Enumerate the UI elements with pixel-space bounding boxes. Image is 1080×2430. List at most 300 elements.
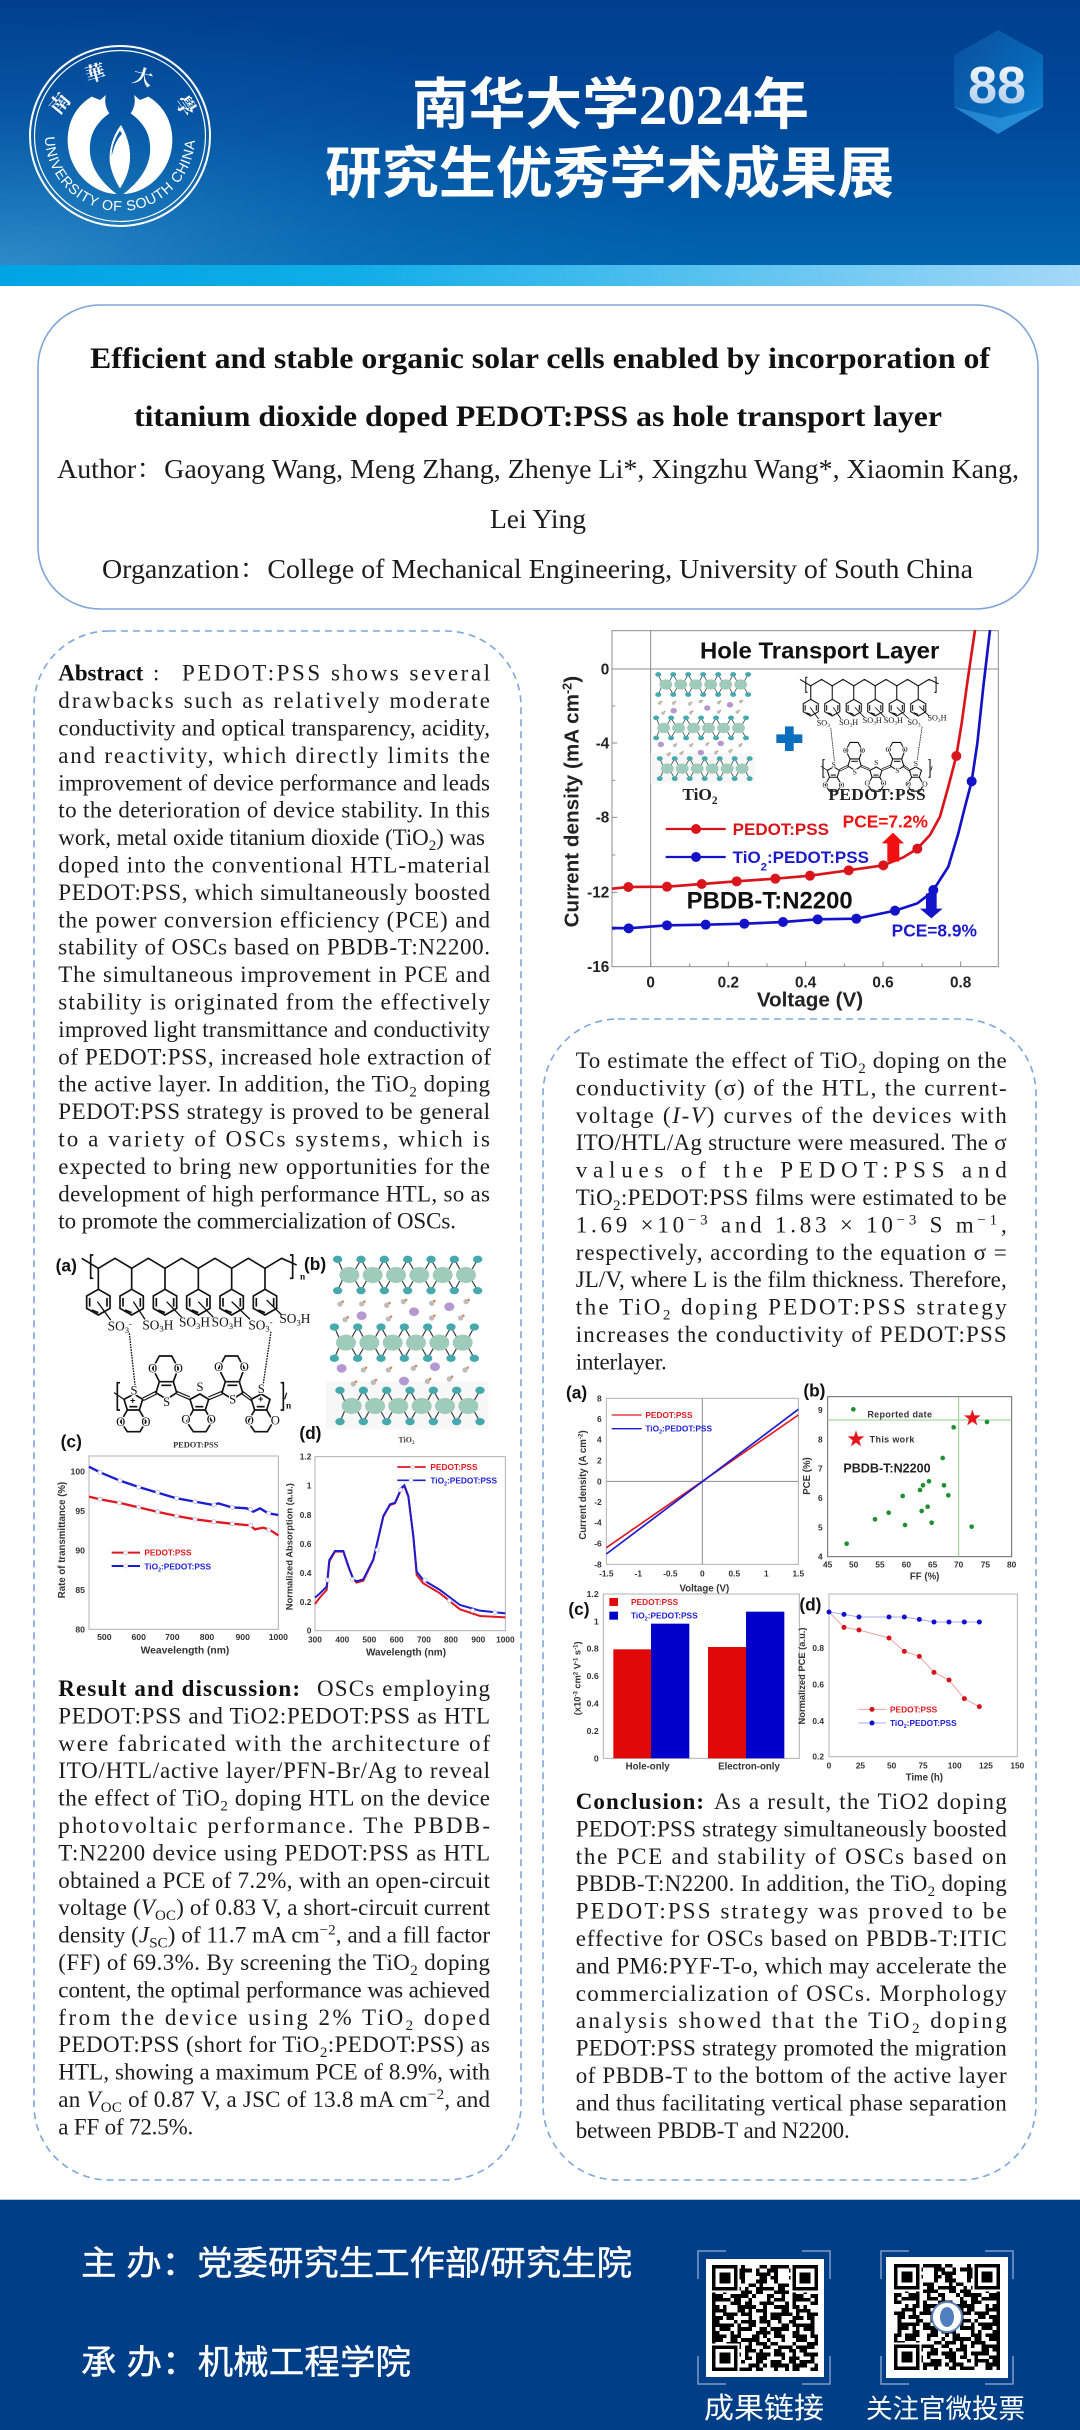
text: abstract: stability of OSCs based on PBDB-T:N2200. bbox=[58, 935, 490, 960]
chart: I-V curves: 6 bbox=[597, 1414, 602, 1424]
text: result and discussion: −2 bbox=[320, 1923, 336, 1939]
chart: normalized absorption: 500 bbox=[362, 1635, 377, 1645]
chemical structure: PEDOT:PSS: O bbox=[148, 1362, 157, 1376]
chart: normalized absorption: 1 bbox=[307, 1481, 312, 1491]
chart: mobility bars: -1 bbox=[573, 1657, 579, 1663]
chart: normalized absorption: 700 bbox=[417, 1635, 431, 1645]
chemical structure: PEDOT:PSS: 3 bbox=[159, 1324, 164, 1334]
text: result and discussion: OC bbox=[155, 1908, 176, 1924]
chart: stability over time: 25 bbox=[856, 1760, 865, 1770]
text: conductivity estimate: 2 bbox=[613, 1198, 621, 1214]
label: PCE 7.2% with arrow bbox=[843, 811, 928, 862]
figure: structures and optical spectra bbox=[56, 1254, 515, 1659]
axis title: current density: -2 bbox=[560, 683, 574, 694]
chart: stability over time: 0.2 bbox=[812, 1752, 824, 1762]
chart: mobility bars: Electron-only bbox=[718, 1762, 780, 1773]
text: result and discussion: 2 bbox=[406, 2018, 413, 2034]
chart: mobility bars: 0.6 bbox=[587, 1671, 599, 1681]
title: 南华大学2024年 bbox=[412, 75, 809, 137]
chart: stability over time: (d) bbox=[799, 1595, 821, 1615]
chemical structure: PEDOT:PSS: 3 bbox=[296, 1317, 301, 1327]
text: abstract: improved light transmittance and conductivity bbox=[58, 1017, 491, 1042]
chart: transmittance: 700 bbox=[165, 1632, 180, 1642]
text: conductivity estimate: the TiO bbox=[576, 1295, 660, 1320]
text: conductivity estimate: doping PEDOT:PSS strategy bbox=[673, 1295, 1007, 1320]
chart: PCE vs FF scatter: 5 bbox=[818, 1522, 823, 1532]
text: conductivity estimate: −1 bbox=[977, 1212, 997, 1228]
chart: I-V curves: 0 bbox=[700, 1568, 705, 1578]
chemical structure: PEDOT:PSS: O bbox=[865, 779, 871, 788]
axis title: current density: Current density (mA cm bbox=[561, 694, 584, 927]
text: conductivity estimate: JL/V, where L is the film thickness. Therefore, bbox=[576, 1267, 1007, 1292]
chemical structure: PEDOT:PSS: O bbox=[116, 1415, 125, 1429]
chart: I-V curves: PEDOT:PSS bbox=[645, 1410, 693, 1420]
text: abstract: development of high performance HTL, so as bbox=[58, 1181, 490, 1206]
chart: normalized absorption: 1.2 bbox=[300, 1452, 312, 1462]
x axis labels: 0.4 bbox=[795, 974, 817, 991]
chart: I-V curves: 0.5 bbox=[729, 1568, 740, 1578]
label: (b): (b) bbox=[304, 1254, 326, 1274]
chemical structure: PEDOT:PSS: O bbox=[886, 745, 892, 754]
text: conductivity estimate: 1.69 ×10 bbox=[576, 1212, 684, 1237]
chemical structure: PEDOT:PSS: O bbox=[214, 1360, 223, 1374]
text: conductivity estimate: 2 bbox=[858, 1061, 866, 1077]
chart: stability over time: :PEDOT:PSS bbox=[907, 1718, 957, 1728]
chemical structure: PEDOT:PSS: O bbox=[881, 779, 887, 788]
illustration: TiO2 layers: 2 bbox=[712, 795, 718, 807]
chart: PCE vs FF scatter: 8 bbox=[818, 1434, 823, 1444]
text: conclusion: doping bbox=[935, 1871, 1007, 1896]
chemical structure: PEDOT:PSS: S bbox=[258, 1382, 265, 1396]
chart: I-V curves: Current density (A cm bbox=[578, 1439, 589, 1540]
text: conductivity estimate: conductivity (σ) of the HTL, the current- bbox=[576, 1075, 1007, 1100]
chart: I-V curves: -0.5 bbox=[663, 1568, 678, 1578]
title: 研究生优秀学术成果展 bbox=[325, 142, 894, 205]
chart: mobility bars: 0.2 bbox=[587, 1726, 599, 1736]
chemical structure: PEDOT:PSS: S bbox=[163, 1395, 170, 1409]
chemical structure: PEDOT:PSS: 3 bbox=[894, 721, 897, 727]
chart: PCE vs FF scatter: 70 bbox=[954, 1560, 964, 1570]
chart: mobility bars: 0.4 bbox=[587, 1699, 599, 1709]
text: result and discussion: the effect of TiO bbox=[58, 1786, 220, 1811]
text: conclusion: and PM6:PYF-T-o, which may accelerate the bbox=[576, 1953, 1007, 1978]
chart: normalized absorption: 0.2 bbox=[300, 1597, 312, 1607]
chart: mobility bars: TiO bbox=[631, 1611, 645, 1621]
text: result and discussion: doped bbox=[416, 2005, 490, 2030]
chemical structure: PEDOT:PSS: SO bbox=[179, 1315, 196, 1330]
chart: normalized absorption: 0.4 bbox=[300, 1568, 312, 1578]
x axis labels: 0.2 bbox=[718, 974, 739, 991]
illustration: TiO2 layers: TiO bbox=[398, 1435, 412, 1444]
chemical structure: PEDOT:PSS: + bbox=[258, 1394, 264, 1404]
chemical structure: PEDOT:PSS: O bbox=[141, 1415, 151, 1429]
chart: mobility bars: 0 bbox=[594, 1753, 599, 1763]
text: result and discussion: OSCs employing bbox=[317, 1676, 490, 1701]
text: conductivity estimate: respectively, according to the equation σ = bbox=[576, 1240, 1007, 1265]
text: conductivity estimate: voltage (I-V) curves of the devices with bbox=[576, 1103, 1007, 1128]
chemical structure: PEDOT:PSS: H bbox=[941, 714, 947, 723]
text: conductivity estimate: :PEDOT:PSS films were estimated to be bbox=[621, 1185, 1007, 1210]
illustration: TiO2 layers: TiO bbox=[682, 785, 712, 804]
chemical structure: PEDOT:PSS: 3 bbox=[125, 1325, 129, 1335]
chart: I-V curves: 2 bbox=[597, 1455, 602, 1465]
text: conclusion: Conclusion: bbox=[576, 1789, 704, 1814]
text: abstract: conductivity and optical transparency, acidity, bbox=[58, 716, 490, 740]
chart: PCE vs FF scatter: 45 bbox=[823, 1560, 833, 1570]
text: result and discussion: HTL, showing a maximum PCE of 8.9%, with bbox=[58, 2060, 491, 2085]
text: authors: Lei Ying bbox=[490, 504, 586, 534]
chart: I-V curves bbox=[566, 1382, 804, 1595]
text: abstract: and reactivity, which directly limits the bbox=[58, 743, 490, 768]
chart: transmittance: 80 bbox=[75, 1624, 85, 1634]
legend: TiO bbox=[733, 848, 761, 867]
chart: transmittance: 90 bbox=[75, 1546, 85, 1556]
text: result and discussion: density (J bbox=[58, 1923, 149, 1948]
chemical structure: PEDOT:PSS: 3 bbox=[265, 1324, 270, 1334]
chart: mobility bars: (x10 bbox=[573, 1697, 583, 1715]
chemical structure: PEDOT:PSS: S bbox=[874, 758, 878, 767]
chart: I-V curves: TiO bbox=[645, 1424, 659, 1434]
chart: transmittance: Weavelength (nm) bbox=[141, 1645, 229, 1656]
chart: mobility bars: :PEDOT:PSS bbox=[648, 1611, 698, 1621]
text: abstract: of PEDOT:PSS, increased hole extraction of bbox=[58, 1044, 491, 1069]
chart: normalized absorption: Wavelength (nm) bbox=[366, 1648, 446, 1659]
chart: mobility bars: 2 bbox=[573, 1671, 579, 1675]
chemical structure: PEDOT:PSS: O bbox=[860, 746, 866, 755]
text: conclusion: PEDOT:PSS strategy promoted the migration bbox=[576, 2036, 1007, 2061]
chemical structure: PEDOT:PSS: SO bbox=[248, 1317, 265, 1332]
text: result and discussion: , and a fill factor bbox=[336, 1923, 490, 1948]
text: result and discussion: T:N2200 device using PEDOT:PSS as HTL bbox=[58, 1840, 490, 1865]
chart: stability over time: 0.8 bbox=[812, 1643, 824, 1653]
chart: normalized absorption: 800 bbox=[444, 1635, 458, 1645]
text: conductivity estimate: values of the PEDOT:PSS and bbox=[576, 1158, 1007, 1183]
chemical structure: PEDOT:PSS: n bbox=[300, 1272, 306, 1282]
heading: paper title: titanium dioxide doped PEDOT:PSS as hole transport layer bbox=[134, 401, 942, 433]
chemical structure: PEDOT:PSS bbox=[800, 677, 947, 804]
caption: results link: 成果链接 bbox=[704, 2392, 824, 2425]
chart: PCE vs FF scatter: PBDB-T:N2200 bbox=[843, 1462, 931, 1476]
text: result and discussion: 2 bbox=[220, 1799, 228, 1815]
text: conductivity estimate: TiO bbox=[576, 1185, 613, 1210]
chemical structure: PEDOT:PSS: SO bbox=[927, 714, 938, 723]
chart: normalized absorption: 300 bbox=[308, 1635, 322, 1645]
legend bbox=[666, 820, 869, 873]
text: abstract: doped into the conventional HTL-material bbox=[58, 852, 490, 878]
chart: mobility bars: PEDOT:PSS bbox=[631, 1597, 679, 1607]
heading: paper title: Efficient and stable organic solar cells enabled by incorporation of bbox=[90, 343, 991, 375]
chemical structure: PEDOT:PSS: H bbox=[301, 1311, 311, 1326]
text: result and discussion: ITO/HTL/active layer/PFN-Br/Ag to reveal bbox=[58, 1758, 490, 1783]
chemical structure: PEDOT:PSS: 3 bbox=[850, 722, 853, 728]
text: conductivity estimate: doping on the bbox=[866, 1048, 1007, 1073]
chart: I-V curves: -4 bbox=[594, 1518, 602, 1528]
text: organizers: 主 办：党委研究生工作部/研究生院 bbox=[81, 2245, 632, 2283]
chemical structure: PEDOT:PSS: O bbox=[922, 779, 928, 788]
chart: stability over time: 150 bbox=[1010, 1760, 1025, 1770]
chart: stability over time: 0.6 bbox=[812, 1679, 824, 1689]
chemical structure: PEDOT:PSS: O bbox=[271, 1414, 280, 1428]
text: result and discussion: an V bbox=[58, 2087, 101, 2112]
chemical structure: PEDOT:PSS: O bbox=[905, 779, 911, 788]
text: abstract: to the deterioration of device stability. In this bbox=[58, 798, 490, 823]
chart: PCE vs FF scatter: 9 bbox=[818, 1405, 823, 1415]
chemical structure: PEDOT:PSS: S bbox=[895, 766, 900, 775]
text: organizers bbox=[81, 2245, 632, 2382]
y axis labels: 0 bbox=[601, 661, 609, 678]
illustration: TiO2 layers bbox=[326, 1256, 488, 1446]
text: conclusion: analysis showed that the TiO bbox=[576, 2008, 909, 2033]
chart: PCE vs FF scatter: 75 bbox=[981, 1560, 990, 1570]
text: abstract: The simultaneous improvement in PCE and bbox=[58, 962, 491, 987]
chart: normalized absorption: 0.6 bbox=[300, 1539, 312, 1549]
chart: mobility bars: 2 bbox=[645, 1617, 648, 1623]
text: result and discussion: from the device using 2% TiO bbox=[58, 2005, 403, 2030]
chemical structure: PEDOT:PSS: SO bbox=[839, 718, 850, 727]
chemical structure: PEDOT:PSS: O bbox=[822, 780, 828, 789]
curve: TiO2:PEDOT:PSS bbox=[612, 630, 990, 933]
text: abstract: PEDOT:PSS shows several bbox=[182, 661, 490, 686]
chart: mobility bars: 0.8 bbox=[587, 1644, 599, 1654]
text: abstract: 2 bbox=[409, 1085, 417, 1101]
text: conductivity estimate: , bbox=[1001, 1212, 1007, 1237]
chart: transmittance: 95 bbox=[75, 1506, 85, 1516]
text: conclusion: PBDB-T:N2200. In addition, the TiO bbox=[576, 1871, 927, 1896]
heading: paper title bbox=[90, 343, 991, 433]
text: conclusion: 2 bbox=[928, 1884, 935, 1900]
x axis labels: 0 bbox=[646, 974, 655, 991]
text: abstract: PEDOT:PSS strategy is proved to be general bbox=[58, 1099, 490, 1124]
chemical structure: PEDOT:PSS: O bbox=[245, 1414, 254, 1428]
chart: PCE vs FF scatter: FF (%) bbox=[910, 1571, 939, 1582]
chemical structure: PEDOT:PSS: 3 bbox=[229, 1321, 233, 1331]
text: abstract: drawbacks such as relatively moderate bbox=[58, 688, 490, 713]
panel: right column bbox=[543, 1019, 1036, 2180]
chemical structure: PEDOT:PSS: + bbox=[130, 1395, 136, 1405]
text: conclusion: PEDOT:PSS strategy simultaneously boosted bbox=[576, 1816, 1007, 1841]
chemical structure: PEDOT:PSS: S bbox=[914, 759, 918, 768]
text: conductivity estimate: −3 bbox=[897, 1212, 916, 1228]
chart: mobility bars: cm bbox=[573, 1675, 583, 1691]
chart: I-V curves: ) bbox=[578, 1430, 589, 1434]
figure: device characterization bbox=[566, 1381, 1025, 1783]
chemical structure: PEDOT:PSS: 3 bbox=[827, 723, 830, 729]
chemical structure: PEDOT:PSS: S bbox=[229, 1393, 236, 1407]
chemical structure: PEDOT:PSS: SO bbox=[863, 716, 873, 725]
text: result and discussion: (FF) of 69.3%. By screening the TiO bbox=[58, 1950, 410, 1975]
text: conclusion: PEDOT:PSS strategy was proved to be bbox=[576, 1899, 1007, 1924]
chart: normalized absorption: PEDOT:PSS bbox=[430, 1462, 478, 1472]
text: conclusion: of PBDB-T to the bottom of the active layer bbox=[576, 2063, 1007, 2088]
badge: number 88 bbox=[954, 30, 1043, 134]
chart: normalized absorption: Normalized Absorption (a.u.) bbox=[284, 1483, 294, 1610]
text: result and discussion: :PEDOT:PSS) as bbox=[328, 2032, 490, 2057]
chemical structure: PEDOT:PSS: O bbox=[207, 1412, 216, 1426]
text: abstract: the power conversion efficiency (PCE) and bbox=[58, 907, 491, 932]
chart: normalized absorption: 0 bbox=[307, 1626, 312, 1636]
text: result and discussion: content, the optimal performance was achieved bbox=[58, 1977, 491, 2002]
text: abstract: ) was bbox=[436, 825, 485, 850]
header banner bbox=[0, 0, 1080, 286]
chart: I-V curves: 8 bbox=[597, 1393, 602, 1403]
chart: I-V curves: (a) bbox=[566, 1382, 587, 1402]
text: conclusion: the PCE and stability of OSCs based on bbox=[576, 1844, 1007, 1869]
chemical structure: PEDOT:PSS: H bbox=[233, 1315, 243, 1330]
chart: stability over time: Time (h) bbox=[906, 1772, 943, 1783]
text: conclusion: commercialization of OSCs. Morphology bbox=[576, 1981, 1007, 2006]
text: abstract: stability is originated from the effectively bbox=[58, 990, 491, 1014]
chart: stability over time: 2 bbox=[904, 1724, 907, 1730]
chemical structure: PEDOT:PSS: O bbox=[902, 745, 908, 754]
chemical structure: PEDOT:PSS: SO bbox=[142, 1317, 159, 1332]
caption: follow and vote: 关注官微投票 bbox=[866, 2394, 1025, 2424]
text: conductivity estimate: To estimate the effect of TiO bbox=[576, 1048, 858, 1073]
chart: transmittance: 100 bbox=[71, 1467, 85, 1477]
text: authors bbox=[57, 454, 1019, 534]
chart: mobility bars: V bbox=[573, 1662, 583, 1672]
chart: normalized absorption: :PEDOT:PSS bbox=[447, 1475, 497, 1485]
text: result and discussion: photovoltaic performance. The PBDB- bbox=[58, 1813, 490, 1838]
chart: stability over time: 0.4 bbox=[812, 1716, 824, 1726]
chart: mobility bars: s bbox=[573, 1650, 583, 1658]
text: conductivity estimate: increases the conductivity of PEDOT:PSS bbox=[576, 1322, 1007, 1347]
text: conductivity estimate: interlayer. bbox=[576, 1349, 667, 1374]
chemical structure: PEDOT:PSS: SO bbox=[884, 716, 894, 725]
label: PCE 8.9% with arrow: PCE=8.9% bbox=[892, 921, 977, 941]
chart: transmittance: PEDOT:PSS bbox=[144, 1548, 192, 1558]
chart: mobility bars: -3 bbox=[573, 1691, 579, 1697]
panel: paper title and authors bbox=[38, 305, 1038, 609]
text: conclusion bbox=[576, 1789, 1007, 2143]
chart: normalized absorption: 900 bbox=[471, 1635, 486, 1645]
label: PEDOT:PSS: PEDOT:PSS bbox=[173, 1440, 219, 1449]
chart: stability over time: Normalized PCE (a.u.) bbox=[797, 1628, 807, 1724]
text: result and discussion bbox=[58, 1676, 491, 2139]
text: conductivity estimate: ITO/HTL/Ag structure were measured. The σ bbox=[576, 1130, 1007, 1155]
text: abstract: : bbox=[153, 661, 159, 686]
chart: I-V curves: Voltage (V) bbox=[679, 1584, 729, 1595]
chemical structure: PEDOT:PSS: H bbox=[897, 716, 903, 725]
text: conclusion: and thus facilitating vertical phase separation bbox=[576, 2090, 1007, 2115]
chemical structure: PEDOT:PSS: S bbox=[853, 767, 857, 776]
chart: PCE vs FF scatter: 7 bbox=[818, 1464, 823, 1474]
chart: stability over time: 0 bbox=[827, 1760, 832, 1770]
y axis labels: -16 bbox=[587, 959, 609, 976]
chemical structure: PEDOT:PSS: - bbox=[270, 1317, 273, 1327]
text: result and discussion: 2 bbox=[410, 1963, 418, 1979]
text: abstract bbox=[58, 661, 491, 1234]
chart: I-V curves: 1.5 bbox=[793, 1568, 804, 1578]
chemical structure: PEDOT:PSS: S bbox=[832, 760, 836, 769]
chart: stability over time: 75 bbox=[918, 1760, 928, 1770]
chart: transmittance: 600 bbox=[131, 1632, 146, 1642]
label: PCE 8.9% with arrow bbox=[892, 893, 977, 941]
icon: plus bbox=[776, 726, 802, 751]
chart: stability over time: TiO bbox=[890, 1718, 904, 1728]
chemical structure: PEDOT:PSS: H bbox=[852, 718, 858, 727]
illustration: TiO2 layers bbox=[651, 672, 755, 807]
chart: PCE vs FF scatter: 60 bbox=[902, 1560, 911, 1570]
text: result and discussion: Result and discussion: bbox=[58, 1676, 300, 1701]
legend: PEDOT:PSS bbox=[733, 820, 829, 839]
chart: I-V curves: -2 bbox=[594, 1497, 602, 1507]
curve: PEDOT:PSS bbox=[612, 630, 975, 892]
x axis labels: 0.8 bbox=[950, 974, 972, 991]
footer bbox=[0, 2199, 1080, 2430]
text: result and discussion: obtained a PCE of 7.2%, with an open-circuit bbox=[58, 1868, 491, 1893]
chemical structure: PEDOT:PSS: H bbox=[164, 1317, 174, 1332]
chart: PCE vs FF scatter: (b) bbox=[803, 1381, 825, 1401]
chemical structure: PEDOT:PSS bbox=[82, 1255, 311, 1449]
text: abstract: to a variety of OSCs systems, which is bbox=[58, 1126, 490, 1152]
chart: stability over time: 100 bbox=[948, 1760, 962, 1770]
chart: PCE vs FF scatter bbox=[802, 1381, 1017, 1582]
text: result and discussion: SC bbox=[149, 1936, 168, 1952]
icon: university logo: 學 bbox=[169, 88, 205, 122]
text: organization: Organzation：College of Mechanical Engineering, University of South China bbox=[102, 554, 973, 584]
chemical structure: PEDOT:PSS: H bbox=[200, 1315, 210, 1330]
text: conclusion: 2 bbox=[912, 2021, 919, 2037]
chart: PCE vs FF scatter: 55 bbox=[875, 1560, 885, 1570]
text: organizers: 承 办：机械工程学院 bbox=[81, 2344, 411, 2382]
icon: university logo: UNIVERSITY OF SOUTH CHINA bbox=[45, 137, 195, 211]
panel: left column bbox=[34, 631, 521, 2180]
axis title: current density: ) bbox=[561, 676, 584, 683]
y axis labels: -8 bbox=[596, 810, 610, 827]
text: result and discussion: OC bbox=[101, 2100, 122, 2116]
text: conductivity estimate bbox=[576, 1048, 1007, 1374]
text: abstract: PEDOT:PSS, which simultaneously boosted bbox=[58, 880, 491, 905]
chart: transmittance: 800 bbox=[200, 1632, 214, 1642]
chart: PCE vs FF scatter: 6 bbox=[818, 1493, 823, 1503]
text: abstract: doping bbox=[417, 1072, 490, 1097]
text: result and discussion: doping bbox=[418, 1950, 490, 1975]
chemical structure: PEDOT:PSS: O bbox=[839, 780, 845, 789]
icon: university logo: 大 bbox=[130, 59, 157, 92]
x axis labels: 0.6 bbox=[872, 974, 894, 991]
chart: I-V curves: -8 bbox=[594, 1559, 602, 1569]
icon: university logo bbox=[29, 45, 211, 227]
label: PBDB-T:N2200: PBDB-T:N2200 bbox=[687, 889, 853, 915]
y axis labels: -12 bbox=[587, 885, 609, 902]
chart: PCE vs FF scatter: 65 bbox=[928, 1560, 938, 1570]
text: authors: Author：Gaoyang Wang, Meng Zhang, Zhenye Li*, Xingzhu Wang*, Xiaomin Kang, bbox=[57, 454, 1019, 484]
chart: normalized absorption: (d) bbox=[299, 1423, 321, 1443]
chart: transmittance: 85 bbox=[75, 1585, 85, 1595]
chemical structure: PEDOT:PSS: S bbox=[196, 1380, 204, 1394]
text: abstract: 2 bbox=[429, 838, 436, 854]
x axis labels bbox=[646, 974, 972, 991]
text: result and discussion: −2 bbox=[428, 2087, 444, 2103]
chart: normalized absorption: 600 bbox=[390, 1635, 404, 1645]
text: result and discussion: were fabricated with the architecture of bbox=[58, 1731, 490, 1756]
chemical structure: PEDOT:PSS: SO bbox=[817, 719, 827, 728]
chart: PCE vs FF scatter: 4 bbox=[818, 1552, 823, 1562]
chemical structure: PEDOT:PSS: 3 bbox=[196, 1321, 200, 1331]
chart: mobility bars: (c) bbox=[568, 1599, 590, 1619]
text: abstract: work, metal oxide titanium dioxide (TiO bbox=[58, 825, 429, 850]
text: conductivity estimate: −3 bbox=[688, 1212, 708, 1228]
text: conductivity estimate: and 1.83 × 10 bbox=[711, 1212, 893, 1237]
chart: PCE vs FF scatter: PCE (%) bbox=[802, 1457, 813, 1495]
chemical structure: PEDOT:PSS: O bbox=[843, 746, 849, 755]
title bbox=[325, 75, 894, 205]
chart: transmittance: TiO bbox=[144, 1561, 158, 1571]
chart: normalized absorption: TiO bbox=[430, 1475, 444, 1485]
chart: mobility bars: ) bbox=[573, 1641, 583, 1645]
text: result and discussion: ) of 0.83 V, a short-circuit current bbox=[176, 1895, 491, 1920]
text: conclusion: doping bbox=[922, 2008, 1007, 2033]
